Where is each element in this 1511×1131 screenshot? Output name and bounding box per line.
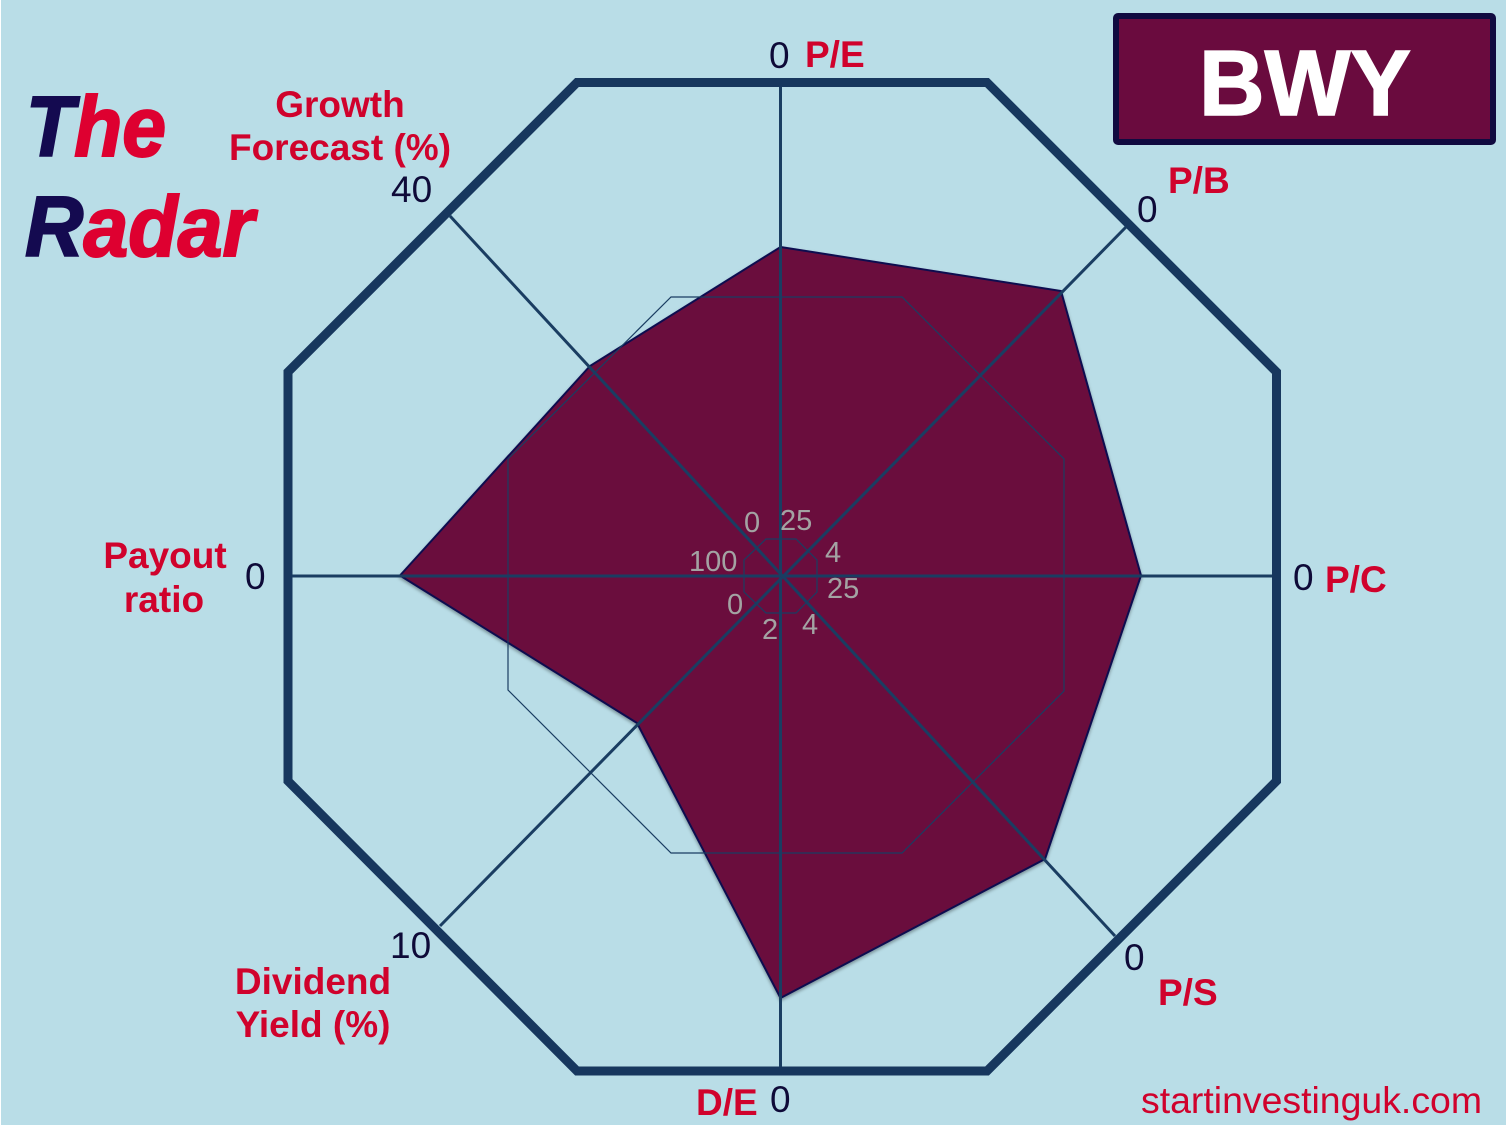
axis label: Dividend Yield <box>235 961 391 1045</box>
inner scale values: 0 <box>744 507 760 539</box>
inner scale values: 25 <box>780 505 812 537</box>
ticker box: BWY: BWY <box>1199 31 1411 135</box>
axis maximum: P/S 0: 0 <box>1124 937 1145 978</box>
radar value polygon <box>400 247 1141 998</box>
inner scale values: 4 <box>825 537 841 569</box>
axis label: P/S: P/S <box>1158 972 1218 1013</box>
inner scale values: 0 <box>727 589 743 621</box>
ticker box: BWY <box>1116 16 1493 142</box>
inner scale octagon <box>508 297 1064 853</box>
axis maximum: Payout 0: 0 <box>245 556 266 597</box>
axis maximum: D/E 0: 0 <box>770 1079 791 1120</box>
axis maximum: P/C 0: 0 <box>1293 557 1314 598</box>
radar spokes <box>292 87 1272 1067</box>
inner scale values: 25 <box>827 573 859 605</box>
axis label: P/E: P/E <box>805 34 865 75</box>
axis maximum: 10: 10 <box>390 925 431 966</box>
axis label: Dividend Yield: Dividend <box>235 961 391 1002</box>
centre scale octagon <box>744 539 817 613</box>
axis label: Growth Forecast: Forecast (%) <box>229 127 451 168</box>
website credit: startinvestinguk.com <box>1141 1080 1482 1121</box>
axis label: Payout ratio: Payout <box>103 535 227 576</box>
axis maximum: P/E 0: 0 <box>769 35 790 76</box>
axis maximum: 40: 40 <box>391 169 432 210</box>
axis label: Growth Forecast: Growth <box>275 84 405 125</box>
title: The Radar: The <box>26 80 166 175</box>
outer octagon frame <box>288 82 1276 1071</box>
title: The Radar <box>25 80 258 275</box>
inner scale values: 100 <box>689 546 737 578</box>
inner scale values: 4 <box>802 609 818 641</box>
inner scale values: 2 <box>762 614 778 646</box>
axis label: P/C: P/C <box>1325 559 1387 600</box>
axis label: Payout ratio <box>103 535 227 620</box>
title: The Radar: Radar <box>25 180 258 275</box>
axis label: Growth Forecast <box>229 84 451 168</box>
axis label: P/B: P/B <box>1168 160 1230 201</box>
axis label: Dividend Yield: Yield (%) <box>236 1004 390 1045</box>
axis label: Payout ratio: ratio <box>124 579 204 620</box>
axis label: D/E: D/E <box>696 1082 758 1123</box>
axis maximum: P/B 0: 0 <box>1137 189 1158 230</box>
inner scale values <box>689 505 859 646</box>
